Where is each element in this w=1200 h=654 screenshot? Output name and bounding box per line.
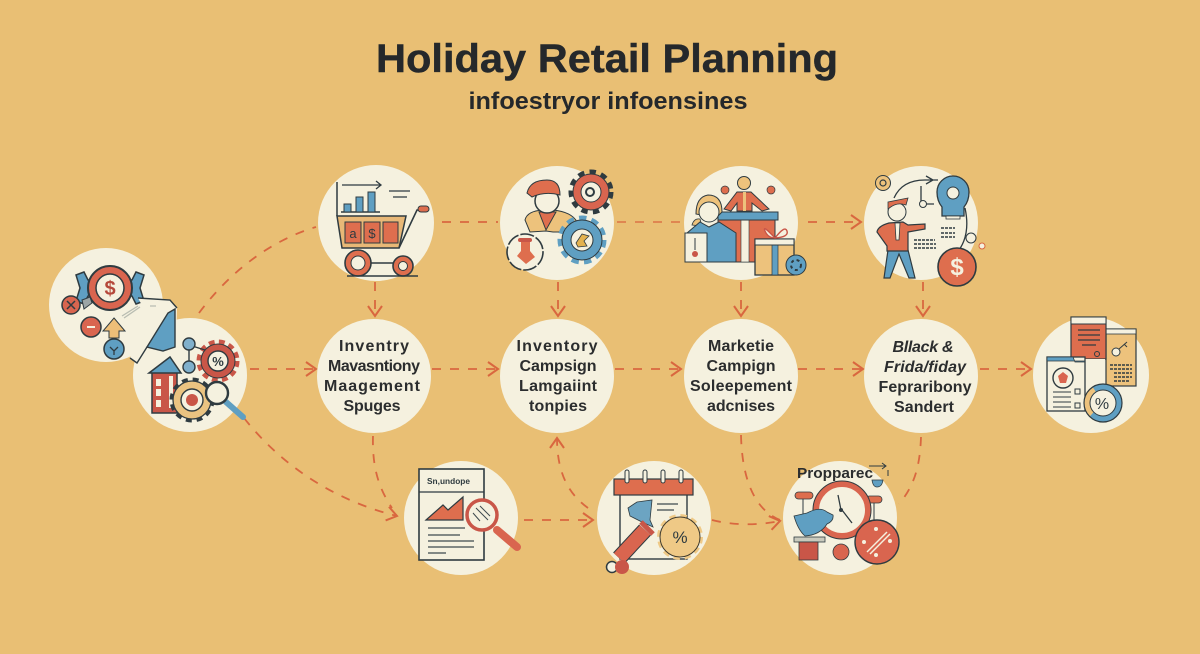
icon: clock xyxy=(813,481,871,539)
icon: tan document xyxy=(1106,329,1136,386)
icon: percent donut: % xyxy=(1095,396,1109,413)
icon: bar chart xyxy=(337,181,410,216)
icon: coin xyxy=(876,176,890,190)
icon: cart: $ xyxy=(368,226,376,241)
icon: blue bird xyxy=(794,509,833,536)
panel: store pricing circle xyxy=(122,298,247,432)
panel: analysis document circle xyxy=(404,461,518,575)
icon: calendar xyxy=(614,470,693,559)
icon: house xyxy=(149,357,181,413)
icon: gift xyxy=(755,229,806,275)
text block: Fepraribony xyxy=(878,379,972,396)
icon: area chart xyxy=(426,497,463,520)
icon: connector loop xyxy=(894,176,967,258)
icon: discount badge xyxy=(855,520,899,564)
text block: Inventory xyxy=(516,338,598,355)
text block: adcnises xyxy=(707,398,775,415)
subtitle: infoestryor infoensines xyxy=(468,88,748,115)
text block: Campign xyxy=(706,358,776,375)
icon: document and pencil xyxy=(122,298,177,363)
text block xyxy=(516,338,598,415)
icon: dollar coin: $ xyxy=(104,278,116,300)
icon: blue gear xyxy=(561,219,603,261)
panel: reports circle xyxy=(1033,317,1149,433)
panel: shopping cart circle xyxy=(318,165,434,281)
icon: person xyxy=(525,180,577,232)
text block: Lamgaiint xyxy=(519,378,598,395)
icon: percent gear: % xyxy=(212,354,224,369)
text block: Maagement xyxy=(324,378,421,395)
text block: Frida/fiday xyxy=(884,359,967,376)
text block: Sandert xyxy=(894,399,955,416)
icon: plinth xyxy=(794,537,825,560)
icon: target node xyxy=(966,233,985,249)
icon: node xyxy=(920,200,926,208)
icon: percent gear: % xyxy=(672,528,688,547)
icon: magnifier xyxy=(467,500,517,547)
text block: Campsign xyxy=(520,358,596,375)
icon: red gift box xyxy=(718,212,778,262)
text block: Soleepement xyxy=(690,378,793,395)
icon: light bulb xyxy=(937,176,969,219)
panel: team and gears circle xyxy=(500,166,614,280)
panel: gift and team circle xyxy=(684,166,806,280)
title: Holiday Retail Planning xyxy=(376,37,838,81)
panel: man with idea circle xyxy=(864,166,985,286)
icon: cart xyxy=(337,206,429,276)
panel: calendar circle xyxy=(597,461,711,575)
document label: Sn,undope xyxy=(427,476,470,486)
panel: clock circle xyxy=(783,461,899,575)
icon: tube xyxy=(606,522,653,574)
icon: blue shape xyxy=(628,500,653,527)
icon: magnifier xyxy=(206,382,243,417)
icon: cart: a xyxy=(349,226,357,241)
icon: red gear xyxy=(572,173,610,211)
text block: Inventry xyxy=(339,338,409,355)
text block: Marketie xyxy=(708,338,774,355)
panel: inventory text circle xyxy=(317,319,431,433)
panel: budget circle xyxy=(49,248,163,362)
text block xyxy=(690,338,793,415)
icon: blue coin xyxy=(104,339,124,359)
panel: marketing text circle xyxy=(684,319,798,433)
text block: tonpies xyxy=(529,398,587,415)
text block: Mavasntiony xyxy=(328,358,420,375)
icon: chart lines xyxy=(914,228,955,248)
icon: up arrow xyxy=(103,318,125,338)
icon: minus coin xyxy=(81,317,101,337)
icon: woman xyxy=(685,195,736,262)
icon: connected nodes xyxy=(183,338,205,373)
panel: black friday text circle xyxy=(864,319,978,433)
text block xyxy=(324,338,421,415)
panel: campaign text circle xyxy=(500,319,614,433)
icon: red document xyxy=(1071,317,1106,359)
text block xyxy=(878,339,972,416)
label: prepare: Propparec xyxy=(797,465,873,482)
icon: red ball xyxy=(833,544,849,560)
icon: cloud badge xyxy=(507,234,543,270)
flow arrows and connectors xyxy=(199,222,1031,524)
icon: dollar coin: $ xyxy=(950,254,964,281)
icon: white document xyxy=(1047,357,1105,411)
icon: man xyxy=(877,198,925,278)
text block: Bllack & xyxy=(892,339,954,356)
text block: Spuges xyxy=(344,398,401,415)
icon: small arrow and bowl xyxy=(869,463,888,487)
icon: small red coin xyxy=(62,296,92,314)
icon: presenter xyxy=(721,176,775,211)
icon: tan gear xyxy=(173,381,211,419)
icon: blue gear arms xyxy=(76,272,144,304)
icon: stands xyxy=(795,492,882,522)
